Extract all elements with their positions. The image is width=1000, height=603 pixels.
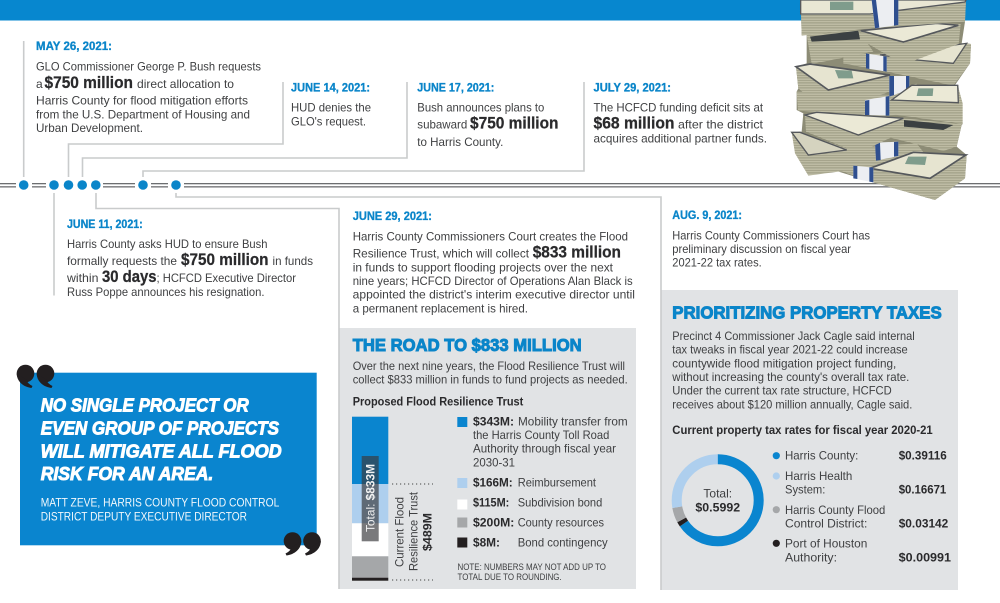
chart legend: Bond contingency xyxy=(518,536,608,550)
icon: closing quotation mark xyxy=(284,532,321,556)
chart legend: 2030-31 xyxy=(473,455,515,469)
timeline entry: June 11, 2021: $750 million xyxy=(181,251,268,269)
timeline entry: June 17, 2021: JUNE 17, 2021: xyxy=(417,82,494,94)
donut legend xyxy=(773,449,951,564)
timeline entry: May 26, 2021: MAY 26, 2021: xyxy=(36,41,112,53)
timeline entry: June 11, 2021: in funds xyxy=(272,254,313,268)
donut chart heading: Current property tax rates for fiscal year 2020-21 xyxy=(672,423,933,437)
timeline entry: June 29, 2021: Harris County Commissioners Court creates the Flood xyxy=(353,230,628,244)
donut legend: $0.16671 xyxy=(899,483,947,497)
image: stack of cash bundles xyxy=(792,0,971,200)
timeline entry: June 17, 2021: subaward xyxy=(417,118,467,132)
timeline entry: June 29, 2021 xyxy=(353,211,635,315)
timeline entry: Aug. 9, 2021: Harris County Commissioners Court has xyxy=(672,228,870,242)
chart legend: Authority through fiscal year xyxy=(473,442,616,456)
timeline entry: June 14, 2021 xyxy=(291,82,371,128)
donut legend: $0.00991 xyxy=(899,550,951,564)
road to $833 million intro text: collect $833 million in funds to fund projects as needed. xyxy=(353,373,628,387)
timeline entry: July 29, 2021: The HCFCD funding deficit sits at xyxy=(594,101,764,115)
chart legend: $200M: xyxy=(473,516,514,530)
icon: opening quotation mark xyxy=(17,365,54,388)
timeline entry: May 26, 2021: Urban Development. xyxy=(36,121,143,135)
stacked bar chart: proposed Flood Resilience Trust xyxy=(352,417,434,581)
donut legend: Harris County: xyxy=(785,449,858,463)
property taxes body text: receives about $120 million annually, Cagle said. xyxy=(672,397,912,411)
timeline entry: July 29, 2021: JULY 29, 2021: xyxy=(594,82,671,94)
donut chart: property tax rates: $0.5992 xyxy=(695,501,740,515)
stacked bar chart: proposed Flood Resilience Trust: Resilience Trust xyxy=(406,491,420,571)
timeline entry: July 29, 2021: acquires additional partner funds. xyxy=(594,132,767,146)
timeline entry: June 17, 2021: Bush announces plans to xyxy=(417,101,545,115)
timeline entry: June 11, 2021: Russ Poppe announces his resignation. xyxy=(67,285,264,299)
heading: prioritizing property taxes: PRIORITIZING PROPERTY TAXES xyxy=(672,302,942,322)
chart footnote: NOTE: NUMBERS MAY NOT ADD UP TO xyxy=(458,562,606,573)
quote attribution xyxy=(41,496,280,523)
quote text: EVEN GROUP OF PROJECTS xyxy=(41,419,279,439)
panel background: the road to $833 million xyxy=(339,328,636,589)
stacked bar chart: proposed Flood Resilience Trust: Total: $833M xyxy=(364,464,378,532)
pull quote xyxy=(17,365,321,556)
timeline entry: July 29, 2021 xyxy=(594,82,767,146)
road to $833 million intro text: Over the next nine years, the Flood Resilience Trust will xyxy=(353,359,625,373)
timeline entry: Aug. 9, 2021 xyxy=(672,210,870,270)
timeline entry: Aug. 9, 2021: preliminary discussion on fiscal year xyxy=(672,242,851,256)
timeline connectors xyxy=(24,41,661,590)
donut legend: $0.03142 xyxy=(899,517,949,531)
property taxes body text: countywide flood mitigation project funding, xyxy=(672,356,896,370)
timeline entry: July 29, 2021: $68 million xyxy=(594,115,674,133)
donut legend: Harris County Flood xyxy=(785,503,885,517)
quote text: NO SINGLE PROJECT OR xyxy=(41,396,249,416)
quote text: WILL MITIGATE ALL FLOOD xyxy=(41,441,282,461)
heading: the road to $833 million: THE ROAD TO $833 MILLION xyxy=(353,335,582,355)
top colour band xyxy=(0,0,1000,20)
chart legend: Mobility transfer from xyxy=(518,414,628,428)
timeline entry: June 17, 2021 xyxy=(417,82,558,149)
donut legend: $0.39116 xyxy=(899,449,947,463)
chart heading: Proposed Flood Resilience Trust xyxy=(353,394,523,408)
quote box xyxy=(20,373,317,545)
timeline entry: June 29, 2021: JUNE 29, 2021: xyxy=(353,211,432,223)
timeline entry: June 14, 2021: JUNE 14, 2021: xyxy=(291,82,370,94)
timeline entry: Aug. 9, 2021: 2021-22 tax rates. xyxy=(672,256,762,270)
timeline entry: June 11, 2021 xyxy=(66,219,313,299)
quote text: RISK FOR AN AREA. xyxy=(41,464,213,484)
chart legend: the Harris County Toll Road xyxy=(473,428,609,442)
donut chart: property tax rates xyxy=(677,459,759,541)
timeline entry: June 29, 2021: in funds to support flooding projects over the next xyxy=(353,260,614,274)
timeline entry: June 29, 2021: Resilience Trust, which will collect xyxy=(353,247,530,261)
timeline entry: May 26, 2021: Harris County for flood mitigation efforts xyxy=(36,94,248,108)
chart legend: $8M: xyxy=(473,536,500,550)
donut legend: Port of Houston xyxy=(785,537,867,551)
timeline axis xyxy=(0,180,1000,190)
property taxes body text: Under the current tax rate structure, HCFCD xyxy=(672,384,892,398)
quote text xyxy=(41,396,282,484)
stacked bar chart: proposed Flood Resilience Trust: Current Flood xyxy=(392,497,406,567)
timeline entry: June 17, 2021: $750 million xyxy=(470,115,558,133)
timeline entry: June 29, 2021: a permanent replacement is hired. xyxy=(353,301,528,315)
chart legend: Subdivision bond xyxy=(518,496,602,510)
timeline entry: June 17, 2021: to Harris County. xyxy=(417,135,503,149)
donut legend: Harris Health xyxy=(785,469,852,483)
donut chart: property tax rates: Total: xyxy=(703,487,732,501)
timeline entry: June 29, 2021: nine years; HCFCD Director of Operations Alan Black is xyxy=(353,274,633,288)
chart legend: Reimbursement xyxy=(518,475,597,489)
timeline entry: May 26, 2021: from the U.S. Department of Housing and xyxy=(36,108,250,122)
timeline entry: June 11, 2021: Harris County asks HUD to ensure Bush xyxy=(67,237,268,251)
chart footnote: TOTAL DUE TO ROUNDING. xyxy=(458,572,562,583)
timeline entry: June 14, 2021: GLO's request. xyxy=(291,114,366,128)
chart legend: $343M: xyxy=(473,414,514,428)
property taxes body text xyxy=(671,329,915,411)
timeline entry: May 26, 2021: a xyxy=(36,77,43,91)
timeline entry: June 14, 2021: HUD denies the xyxy=(291,101,371,115)
timeline entry: June 29, 2021: $833 million xyxy=(533,244,621,262)
chart legend: $115M: xyxy=(473,496,509,510)
timeline entry: June 11, 2021: 30 days xyxy=(102,268,156,286)
timeline entry: May 26, 2021: $750 million xyxy=(44,74,133,92)
panel background: prioritizing property taxes xyxy=(661,290,958,590)
timeline entry: May 26, 2021: direct allocation to xyxy=(137,77,234,91)
chart footnote xyxy=(458,562,606,583)
property taxes body text: without increasing the county's overall tax rate. xyxy=(671,370,909,384)
chart legend: $166M: xyxy=(473,475,513,489)
timeline entry: May 26, 2021 xyxy=(36,41,261,135)
timeline entry: June 11, 2021: formally requests the xyxy=(67,254,177,268)
donut legend: Authority: xyxy=(785,550,837,564)
quote attribution: DISTRICT DEPUTY EXECUTIVE DIRECTOR xyxy=(41,509,247,523)
timeline entry: July 29, 2021: after the district xyxy=(678,118,764,132)
quote attribution: MATT ZEVE, HARRIS COUNTY FLOOD CONTROL xyxy=(41,496,280,510)
timeline entry: June 11, 2021: JUNE 11, 2021: xyxy=(67,219,143,231)
chart legend: County resources xyxy=(518,516,604,530)
timeline entry: June 11, 2021: within xyxy=(66,271,98,285)
donut legend: System: xyxy=(785,483,825,497)
property taxes body text: Precinct 4 Commissioner Jack Cagle said internal xyxy=(672,329,915,343)
donut legend: Control District: xyxy=(785,517,867,531)
chart legend xyxy=(457,414,628,550)
timeline entry: June 29, 2021: appointed the district's interim executive director until xyxy=(353,288,635,302)
timeline entry: June 11, 2021: ; HCFCD Executive Director xyxy=(156,271,296,285)
road to $833 million intro text xyxy=(353,359,628,387)
timeline entry: May 26, 2021: GLO Commissioner George P. Bush requests xyxy=(36,60,261,74)
stacked bar chart: proposed Flood Resilience Trust: $489M xyxy=(420,513,434,551)
timeline entry: Aug. 9, 2021: AUG. 9, 2021: xyxy=(672,210,742,222)
property taxes body text: tax tweaks in fiscal year 2021-22 could increase xyxy=(672,343,908,357)
